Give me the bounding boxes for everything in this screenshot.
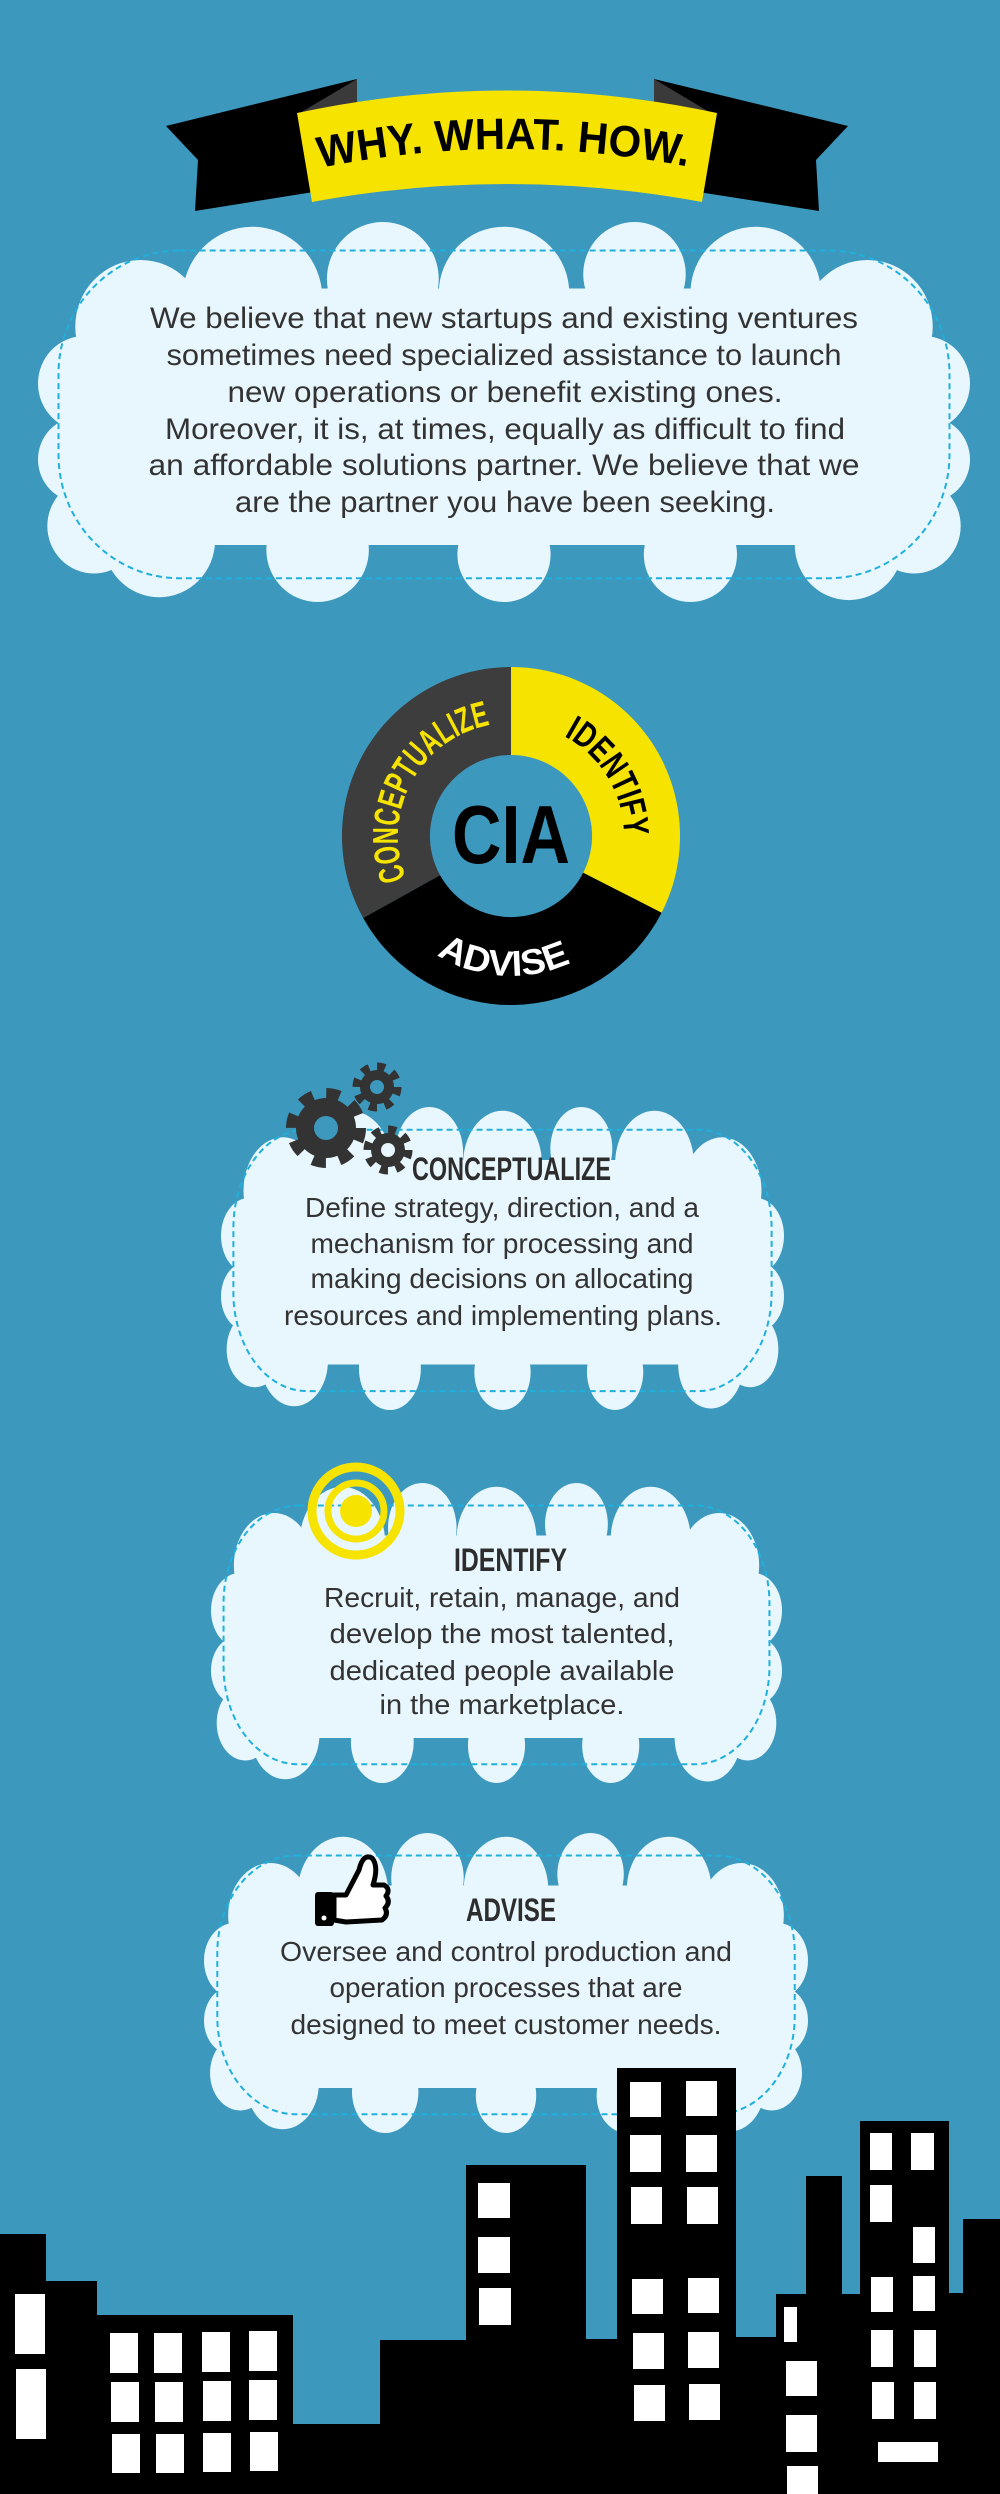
panel: advise xyxy=(204,1833,808,2133)
heading: conceptualize: CONCEPTUALIZE xyxy=(412,1151,611,1187)
heading: advise: ADVISE xyxy=(466,1892,556,1928)
text: conceptualize: Define strategy, direction, and a xyxy=(305,1192,699,1223)
CIA donut chart xyxy=(342,667,680,1005)
panel: conceptualize xyxy=(221,1067,784,1410)
text: advise: designed to meet customer needs. xyxy=(290,2009,722,2040)
intro text: sometimes need specialized assistance to launch xyxy=(166,339,842,372)
CIA donut chart: CONCEPTUALIZE xyxy=(373,701,490,883)
icon: target xyxy=(312,1467,400,1555)
intro text: We believe that new startups and existing ventures xyxy=(150,302,858,335)
text: conceptualize: mechanism for processing and xyxy=(310,1228,694,1259)
text: identify: dedicated people available xyxy=(330,1655,674,1686)
heading: identify: IDENTIFY xyxy=(454,1542,567,1578)
text: identify xyxy=(324,1582,680,1720)
icon: gears xyxy=(292,1067,408,1170)
text: advise: Oversee and control production and xyxy=(280,1936,732,1967)
city skyline xyxy=(0,2068,1000,2494)
intro cloud xyxy=(38,222,970,602)
title banner xyxy=(166,79,848,211)
CIA donut chart: ADVISE xyxy=(437,938,570,976)
title banner: WHY. WHAT. HOW. xyxy=(314,118,686,166)
text: advise xyxy=(280,1936,732,2040)
text: identify: Recruit, retain, manage, and xyxy=(324,1582,680,1613)
text: identify: develop the most talented, xyxy=(330,1618,674,1649)
icon: thumbs up xyxy=(315,1857,388,1926)
intro text: Moreover, it is, at times, equally as difficult to find xyxy=(165,413,845,446)
text: conceptualize: making decisions on allocating xyxy=(310,1263,694,1294)
intro text: new operations or benefit existing ones. xyxy=(228,376,782,409)
intro text: an affordable solutions partner. We believe that we xyxy=(148,449,860,482)
text: conceptualize xyxy=(284,1192,722,1331)
text: advise: operation processes that are xyxy=(330,1972,682,2003)
CIA donut chart: IDENTIFY xyxy=(566,716,649,834)
CIA donut chart: CIA xyxy=(452,788,570,881)
text: conceptualize: resources and implementing plans. xyxy=(284,1300,722,1331)
intro text: are the partner you have been seeking. xyxy=(235,486,775,519)
panel: identify xyxy=(211,1467,782,1783)
intro text xyxy=(148,302,860,519)
text: identify: in the marketplace. xyxy=(380,1689,624,1720)
